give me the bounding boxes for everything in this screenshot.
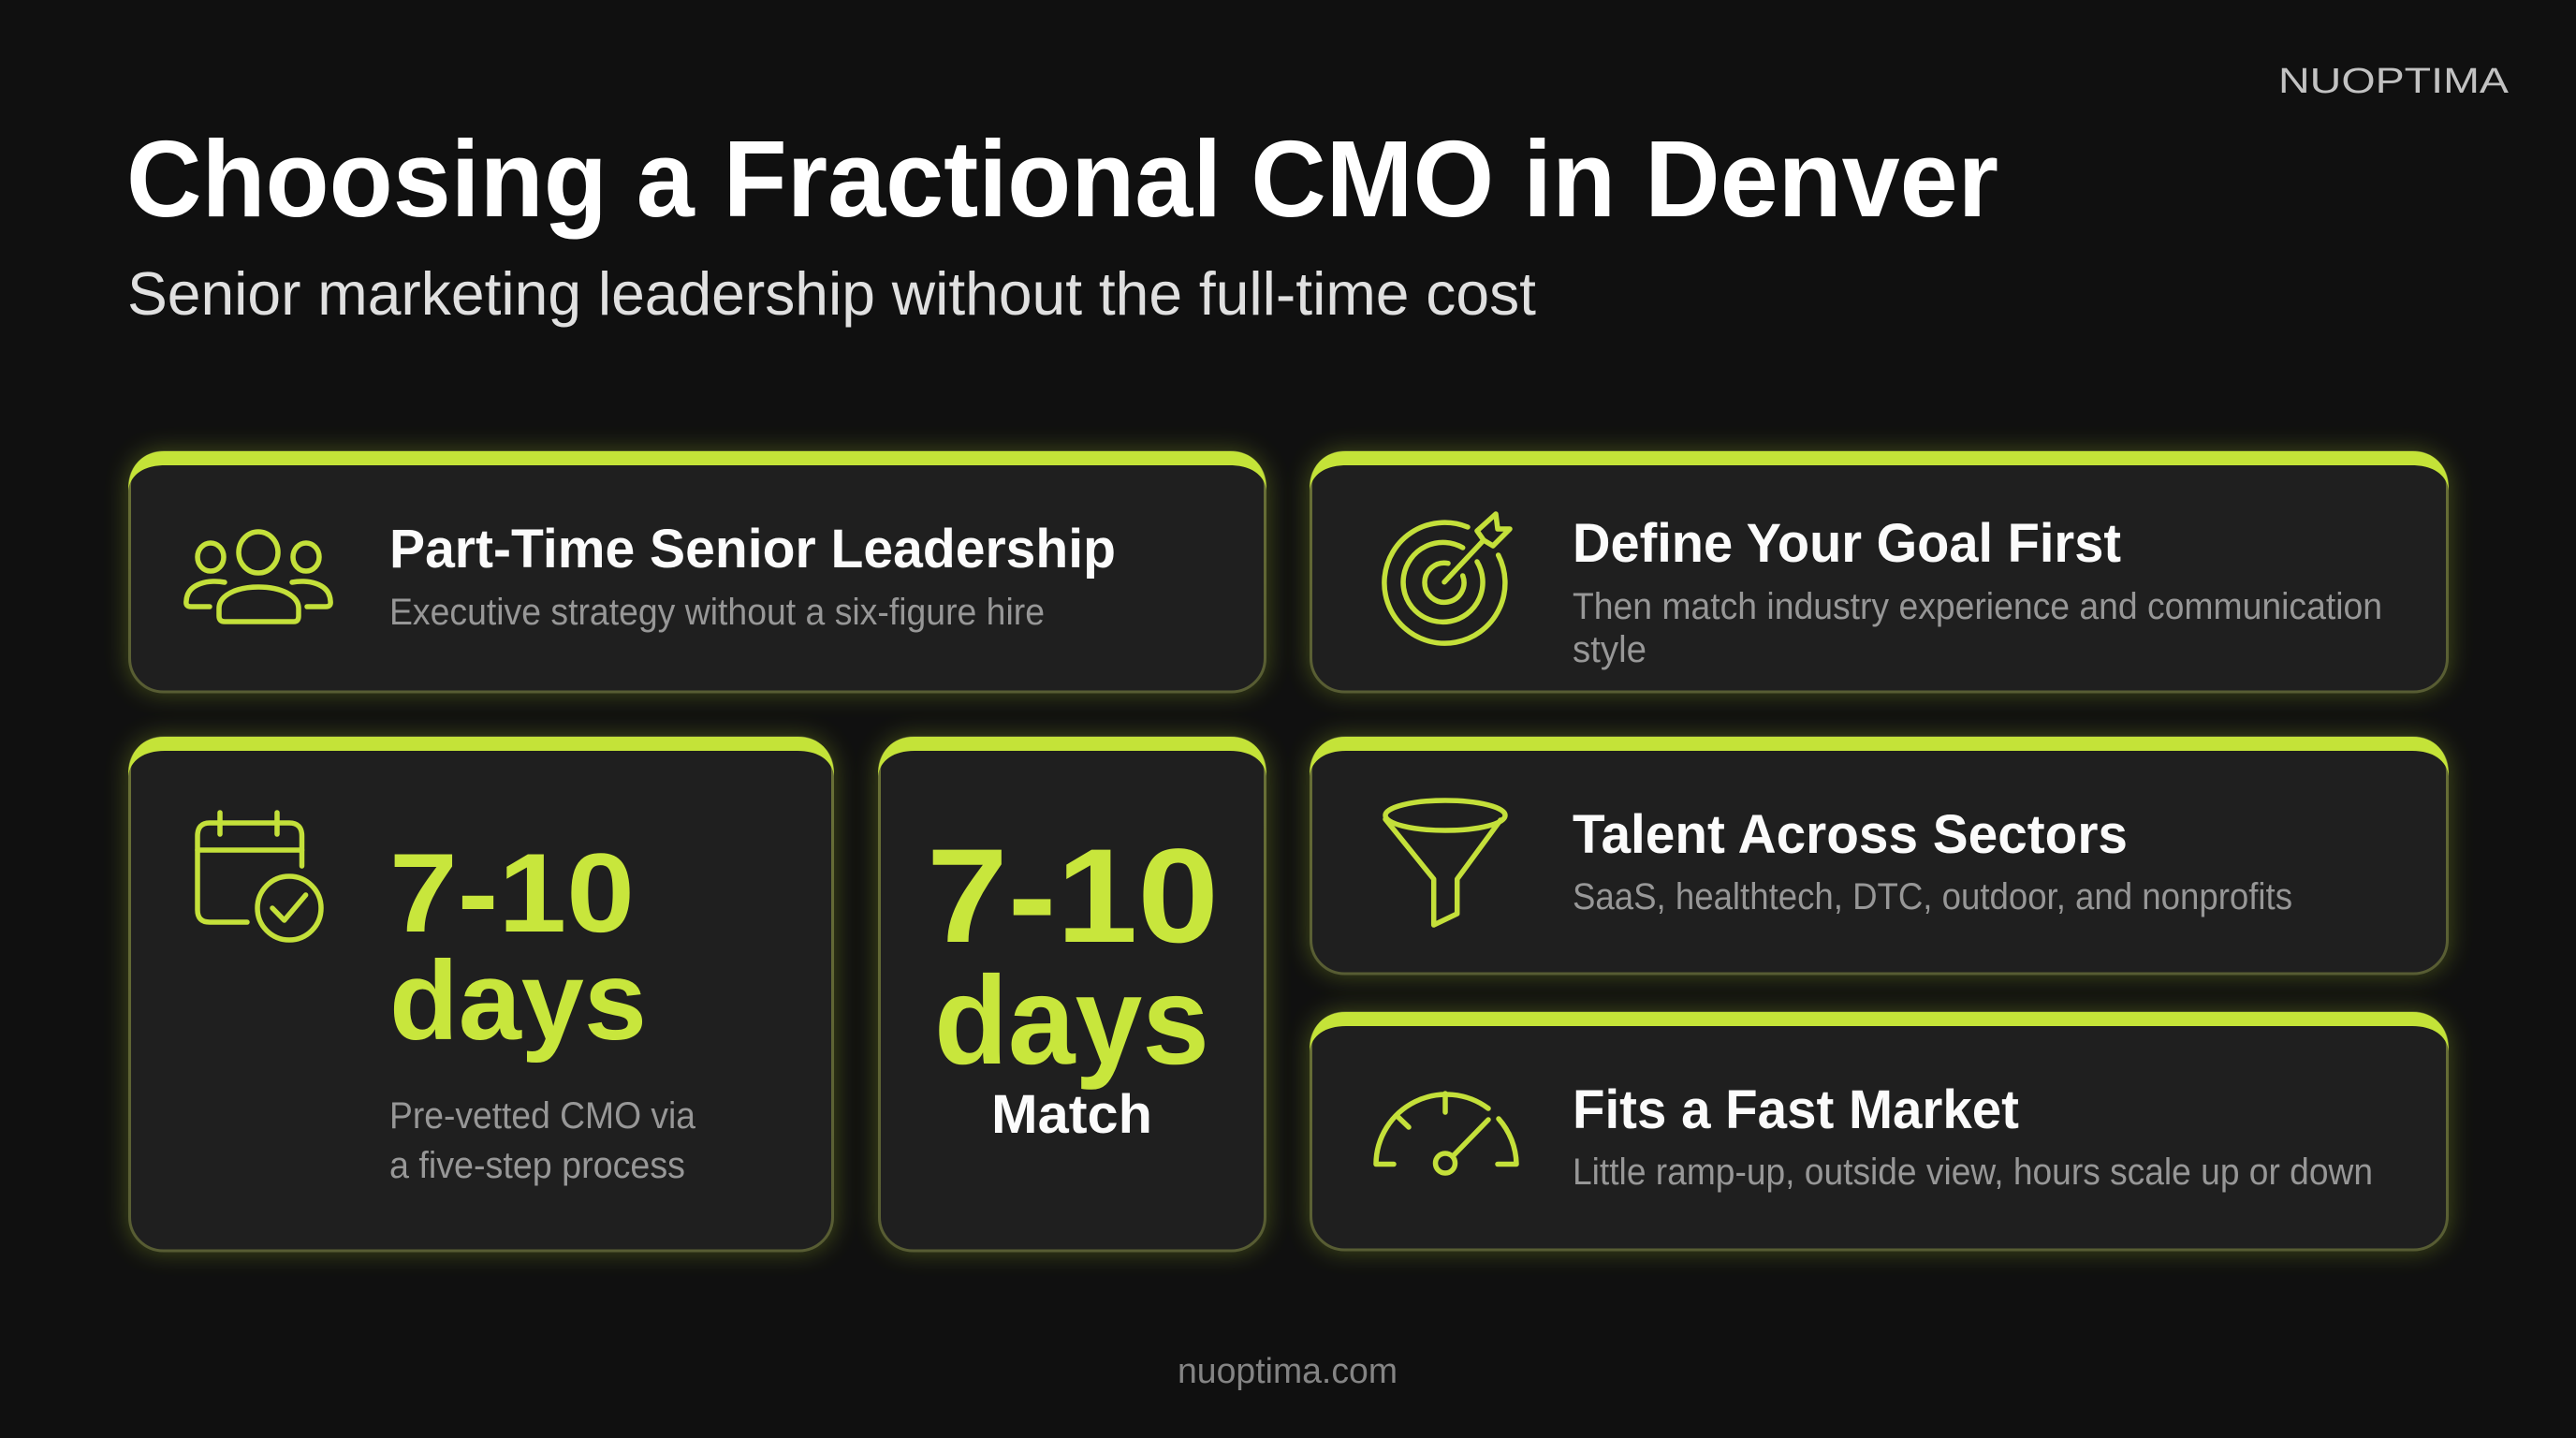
card description: Then match industry experience and communication — [1573, 586, 2382, 627]
big stat: 7-10 — [927, 822, 1219, 971]
big stat unit: days — [389, 938, 647, 1064]
panel: talent across sectors — [1310, 737, 2449, 975]
panel: 7-10 days match — [878, 737, 1266, 1252]
subtitle: Senior marketing leadership without the full-time cost — [127, 259, 1536, 328]
icon: target with arrow — [1384, 514, 1510, 643]
big stat unit: days — [934, 951, 1209, 1091]
stat description: Pre-vetted CMO via — [389, 1095, 696, 1137]
icon: speedometer — [1376, 1093, 1516, 1173]
panel: 7-10 days pre-vetted — [128, 737, 834, 1252]
stat description continued: a five-step process — [389, 1145, 685, 1186]
panel: define your goal first — [1310, 451, 2449, 693]
big stat: 7-10 — [389, 830, 635, 956]
icon: group of people — [186, 532, 330, 622]
card heading: Talent Across Sectors — [1573, 804, 2128, 865]
card description: Little ramp-up, outside view, hours scale up or down — [1573, 1152, 2373, 1193]
brand wordmark: NUOPTIMA — [2278, 62, 2510, 101]
icon: calendar with check — [198, 813, 321, 940]
card description continued: style — [1573, 629, 1647, 670]
card heading: Define Your Goal First — [1573, 513, 2121, 574]
stat label: Match — [991, 1084, 1152, 1145]
panel: fits a fast market — [1310, 1012, 2449, 1251]
icon: funnel — [1385, 800, 1505, 925]
card heading: Part-Time Senior Leadership — [389, 519, 1116, 580]
footer url: nuoptima.com — [1178, 1352, 1398, 1391]
card heading: Fits a Fast Market — [1573, 1079, 2019, 1140]
panel: part-time senior leadership — [128, 451, 1266, 693]
card description: Executive strategy without a six-figure hire — [389, 592, 1045, 633]
card description: SaaS, healthtech, DTC, outdoor, and nonprofits — [1573, 876, 2292, 917]
title: Choosing a Fractional CMO in Denver — [126, 118, 1998, 240]
